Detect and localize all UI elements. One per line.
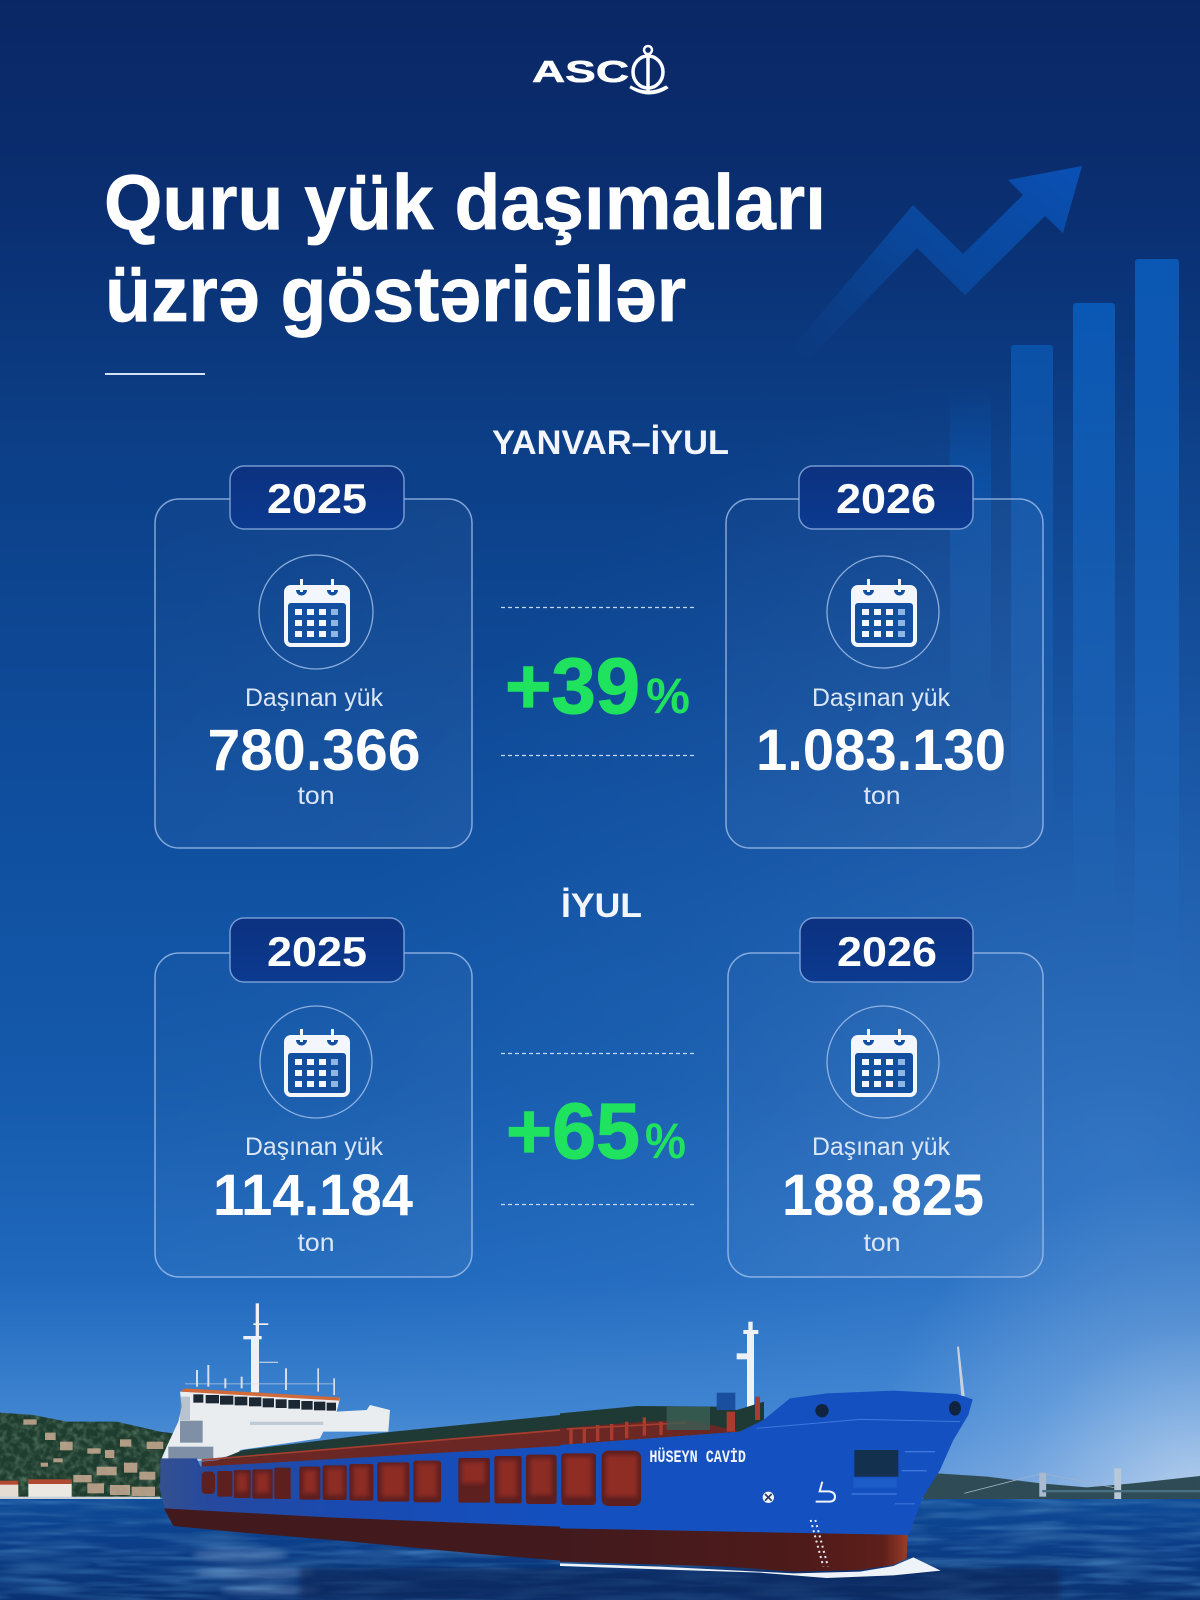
fore mast	[737, 1322, 758, 1423]
hold opening highlights	[565, 1455, 637, 1497]
cargo hold openings	[561, 1451, 641, 1506]
calendar icon	[259, 555, 373, 669]
year tab 2025	[230, 918, 404, 982]
value: 780.366	[208, 718, 420, 783]
hillside with buildings, left shore	[0, 1413, 173, 1500]
deck cargo	[202, 1415, 560, 1467]
photo: sea and ship	[0, 1303, 1200, 1600]
bow hull lines	[852, 1451, 935, 1504]
unit: ton	[864, 782, 900, 810]
change callout: +65%: %	[645, 1113, 686, 1169]
decorative bar chart	[950, 259, 1179, 999]
hills right with bridge	[922, 1468, 1200, 1507]
label: Daşınan yük	[812, 1133, 950, 1161]
bow emblem	[763, 1492, 774, 1503]
section heading: İyul: İYUL	[561, 887, 642, 925]
calendar icon	[827, 556, 939, 668]
logo: ASCO: ASC	[532, 54, 629, 89]
bow wave	[560, 1557, 941, 1578]
rails on bridge roof	[185, 1365, 335, 1395]
year tab 2026: 2026	[837, 928, 937, 975]
change callout: +39%: %	[646, 668, 690, 724]
water	[0, 1499, 1200, 1600]
value: 1.083.130	[756, 718, 1006, 783]
year tab 2026	[800, 918, 973, 982]
unit: ton	[864, 1229, 900, 1257]
draft marks	[811, 1520, 828, 1567]
value: 188.825	[782, 1163, 984, 1228]
aft mast	[243, 1303, 278, 1392]
bridge windows	[193, 1394, 336, 1411]
decorative growth arrow	[790, 166, 1082, 358]
hawse pipes	[815, 1401, 961, 1417]
panel: January-July 2025	[155, 466, 472, 848]
change callout: +39%	[501, 608, 696, 756]
bow highlight line	[757, 1419, 960, 1428]
logo anchor mark	[630, 46, 668, 94]
red boot topping	[560, 1528, 908, 1572]
title: Quru yük daşımaları	[104, 158, 826, 246]
value: 114.184	[213, 1163, 413, 1228]
superstructure	[162, 1392, 390, 1461]
title	[104, 158, 826, 338]
blue hull	[160, 1446, 560, 1527]
cargo hold openings	[202, 1455, 557, 1504]
ship stern section	[160, 1303, 560, 1561]
section heading: Yanvar-İyul: YANVAR–İYUL	[492, 424, 729, 462]
unit: ton	[298, 1229, 334, 1257]
change callout: +39%: +39	[505, 641, 640, 730]
panel: July 2025	[155, 918, 472, 1277]
year tab 2025	[230, 466, 404, 529]
title underline	[105, 373, 205, 375]
label: Daşınan yük	[245, 684, 383, 712]
ship name: HÜSEYN CAVİD	[649, 1448, 746, 1468]
lower house shadows	[168, 1397, 213, 1459]
forward antenna	[957, 1347, 965, 1396]
calendar icon	[827, 1006, 939, 1118]
change callout: +65%: +65	[506, 1086, 640, 1175]
title: üzrə göstəricilər	[105, 250, 686, 338]
bow window	[854, 1450, 898, 1477]
year tab 2026: 2026	[836, 475, 936, 522]
blue hull	[560, 1391, 973, 1535]
blue deck container	[717, 1393, 735, 1410]
hold opening highlights	[237, 1458, 552, 1497]
ship bow section	[560, 1322, 973, 1578]
label: Daşınan yük	[812, 684, 950, 712]
red boot topping	[164, 1508, 560, 1561]
year tab 2026	[799, 466, 973, 529]
unit: ton	[298, 782, 334, 810]
deck cargo forward	[560, 1402, 764, 1445]
company mark on bow	[816, 1482, 835, 1502]
year tab 2025: 2025	[267, 475, 367, 522]
change callout: +65%	[501, 1054, 696, 1204]
label: Daşınan yük	[245, 1133, 383, 1161]
logo: ASCO	[532, 46, 668, 94]
panel: July 2026	[728, 918, 1043, 1277]
panel: January-July 2026	[726, 466, 1043, 848]
year tab 2025: 2025	[267, 928, 367, 975]
calendar icon	[260, 1006, 372, 1118]
